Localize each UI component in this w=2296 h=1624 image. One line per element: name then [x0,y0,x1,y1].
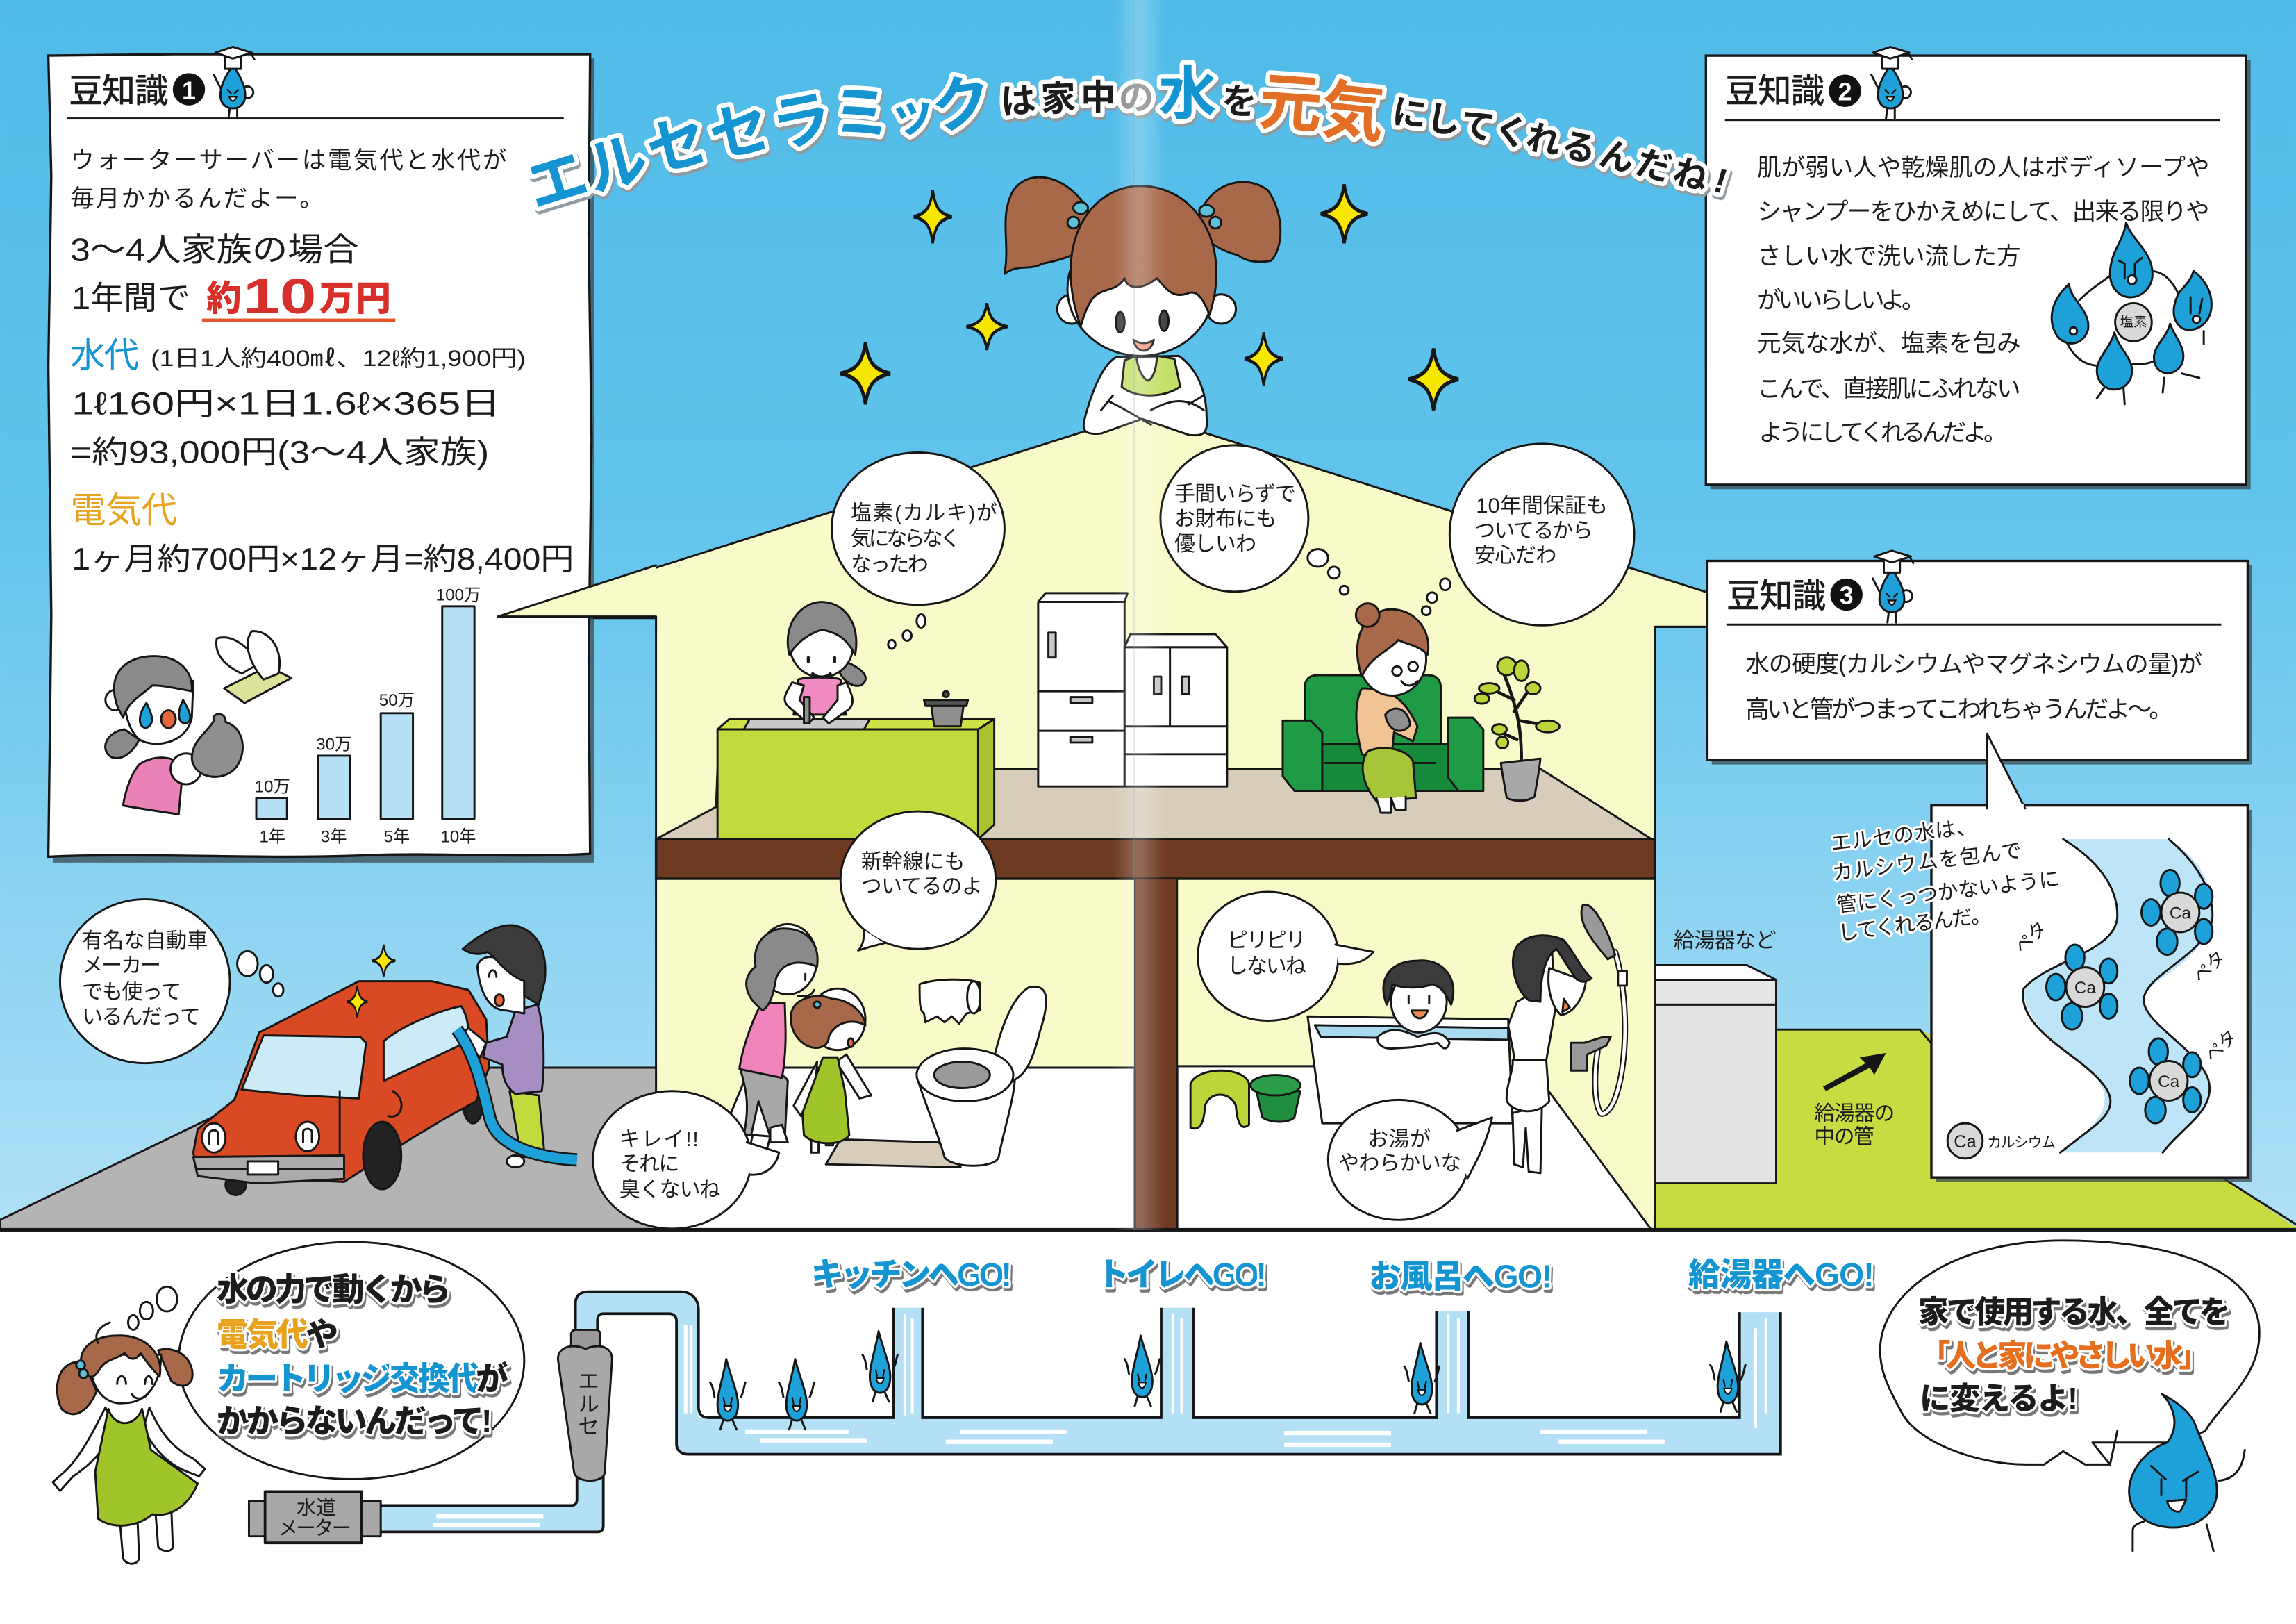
speech bubble: not tingling: ピリピリ [1227,929,1306,952]
mascot 2 [1872,47,1913,119]
upper floor [656,769,1652,839]
title: し [1424,99,1463,142]
bar chart [255,586,481,846]
calcium legend: カルシウム [1987,1135,2056,1151]
woman at kitchen [785,602,865,724]
mascot 1 [214,47,255,119]
house walls and roof [498,413,1815,1230]
pigtail right [1198,182,1281,262]
heading 1 [67,73,564,119]
electricity cost [70,490,574,577]
title: る [1558,126,1600,170]
heading 1: 1 [182,76,196,104]
family cost heading: 1年間で [72,280,190,316]
bubble: no electricity or cartridge cost [178,1242,524,1479]
handwritten note: 管にくっつかないように [1836,867,2061,917]
title: だ [1632,143,1675,189]
family cost heading: 3〜4人家族の場合 [70,231,359,267]
title: を [1221,81,1258,122]
drops surrounding chlorine: 塩素 [2120,315,2147,330]
heading 2: 豆知識 [1725,73,1824,110]
chlorine text [1757,155,2210,447]
title [519,61,1731,222]
panel 1: water server cost [49,47,594,863]
annual cost callout: 10 [243,269,316,324]
water cost: 1ℓ160円×1日1.6ℓ×365日 [72,386,501,422]
pigtail left [1004,177,1092,274]
water meter: メーター [278,1518,351,1540]
speech bubble: car makers: いるんだって [82,1006,201,1029]
title: は [999,80,1037,122]
chlorine text: さしい水で洗い流した方 [1757,244,2021,270]
label: pipe inside water heater: 給湯器の [1814,1102,1895,1125]
crying woman [106,656,243,814]
pipe outlines [381,1292,1781,1532]
speech bubble: easy on wallet: 優しいわ [1174,533,1256,556]
bubble: no electricity or cartridge cost: カートリッジ交換代が [217,1361,508,1397]
speech bubble: 10-year warranty: ついてるから [1474,520,1593,542]
plant [1474,658,1559,801]
calcium legend: Ca [1954,1132,1977,1152]
heading 1: 豆知識 [69,73,168,110]
bar chart: 1年 [259,827,285,846]
GO labels: 給湯器へGO! [1688,1257,1874,1293]
chlorine text: 元気な水が、塩素を包み [1757,331,2021,357]
panel 3: water hardness [1707,551,2252,765]
heading 3: 3 [1840,582,1854,610]
heading 3: 豆知識 [1727,577,1826,615]
bubble: all household water: 「人と家にやさしい水」 [1920,1339,2210,1373]
bubble: no electricity or cartridge cost: 水の力で動くから [217,1271,451,1307]
drops surrounding chlorine [2052,222,2211,404]
grandmother on sofa [1356,604,1429,813]
speech bubble: clean: キレイ!! [619,1128,699,1151]
title: ミ [826,77,896,152]
toilet [917,986,1046,1166]
title: ク [928,69,995,142]
electricity cost: 電気代 [70,490,177,531]
water highlights [433,1314,1767,1527]
speech bubble: easy on wallet: 手間いらずで [1174,483,1296,506]
little girl [791,988,872,1152]
intro text: 毎月かかるんだよー。 [70,185,324,212]
hardness text: 高いと管がつまってこわれちゃうんだよ〜。 [1745,697,2173,723]
speech bubble: 10-year warranty: 安心だわ [1474,545,1556,567]
bar chart: 100万 [436,586,481,604]
speech bubble: not tingling: しないね [1227,955,1306,978]
bathroom [1190,904,1627,1173]
left outside: driveway [0,1068,656,1230]
mother bending [740,924,817,1148]
bathroom floor [1177,1066,1652,1230]
hose [457,1029,577,1160]
speech bubble: shinkansen: 新幹線にも [861,850,965,873]
sky background [0,0,2296,1232]
peta labels: ペタ [2201,1025,2241,1066]
filter: ELSE ceramic [558,1329,612,1481]
bar chart: 5年 [384,827,410,846]
water cost: 水代 [70,335,139,375]
water pipe system [381,1292,1781,1532]
intro text [70,147,507,212]
speech bubble: car makers [60,900,283,1063]
kitchen counter [717,719,995,839]
chlorine text: シャンプーをひかえめにして、出来る限りや [1757,199,2210,225]
speech bubble: chlorine: なったわ [851,553,929,576]
title: ん [1596,134,1638,180]
big girl on the roof [1004,177,1281,436]
man washing car [458,925,545,1167]
bar chart: 30万 [316,735,351,754]
chlorine text: こんで、直接肌にふれない [1757,376,2021,402]
mascot 3 [1873,551,1914,622]
speech bubble: car makers: でも使って [82,981,181,1004]
peta labels: ペタ [2189,947,2229,987]
title: ! [1710,161,1731,201]
title: ラ [766,84,838,161]
big water drop mascot [2110,1394,2245,1551]
bubble: no electricity or cartridge cost: かからないんだって! [217,1403,492,1439]
handwritten note [1829,815,2061,945]
car [193,981,489,1195]
water cost: =約93,000円(3〜4人家族) [70,434,489,470]
bar chart: 10年 [440,827,476,846]
calcium clusters [2142,870,2213,955]
title: ね [1669,152,1712,199]
title: ル [579,124,654,205]
bar chart: 50万 [379,691,415,710]
filter: ELSE ceramic: セ [578,1415,599,1439]
title: く [1490,110,1531,155]
bottom edge line [0,1228,2296,1232]
bubble: all household water [1880,1241,2259,1464]
heading 3 [1727,577,2221,626]
label: water heater: 給湯器など [1674,929,1777,952]
speech bubble: chlorine [832,452,1004,649]
title: て [1457,105,1497,148]
walking water drops [710,1332,1745,1430]
arrow to pipe [1823,1053,1886,1091]
water cost [70,335,526,470]
pipe walls [2023,839,2213,1152]
person showering [1506,936,1592,1173]
filter: ELSE ceramic: エ [578,1370,599,1393]
title: に [1390,92,1429,135]
calcium cluster 2 [2047,945,2118,1029]
title: エ [519,141,596,222]
electricity cost: 1ヶ月約700円×12ヶ月=約8,400円 [72,542,574,577]
speech bubble: 10-year warranty [1422,444,1634,625]
speech bubble: soft water: お湯が [1367,1128,1431,1151]
chlorine text: がいいらしいよ。 [1757,288,1926,314]
chlorine text: ようにしてくれるんだよ。 [1758,420,2008,447]
speech bubble: shinkansen: ついてるのよ [861,875,983,898]
bar chart: 3年 [321,827,347,846]
sparkle on car [372,945,395,977]
title: ッ [886,85,940,144]
annual cost callout [202,269,395,324]
speech bubble: easy on wallet [1161,445,1349,595]
peta labels: ペタ [2011,917,2051,958]
kitchen pot [924,691,968,727]
water pipe [2024,839,2213,1152]
house right wall line [1655,627,1713,1230]
handwritten note: してくれるんだ。 [1837,904,1993,945]
title: セ [704,93,776,171]
handwritten note: カルシウムを包んで [1831,839,2023,885]
fold highlight [1113,0,1165,1230]
house interior: toilet room [740,924,1046,1167]
peta labels [2011,917,2241,1066]
title: の [1119,78,1154,117]
water meter [249,1491,381,1543]
title: セ [640,106,715,185]
speech bubble: chlorine: 気にならなく [851,527,960,550]
filter: ELSE ceramic: ル [578,1393,599,1416]
intro text: ウォーターサーバーは電気代と水代が [70,147,507,174]
handwritten note: エルセの水は、 [1829,815,1978,856]
family cost heading [70,231,359,316]
annual cost callout: 約 [206,279,242,318]
sparkles [840,185,1458,410]
water heater [1655,965,1777,1184]
speech bubble: chlorine: 塩素(カルキ)が [851,502,997,524]
title: 中 [1081,78,1116,117]
boy in tub [1378,961,1454,1049]
annual cost callout: 万円 [319,279,391,318]
fold crease [1133,0,1135,1230]
speech bubble: car makers: メーカー [82,954,161,977]
GO labels: キッチンへGO! [811,1257,1012,1293]
hardness text: 水の硬度(カルシウムやマグネシウムの量)が [1745,652,2202,678]
speech bubble: clean [593,1091,779,1229]
calcium legend [1947,1123,2056,1159]
title: れ [1523,118,1564,163]
label: pipe inside water heater: 中の管 [1814,1126,1874,1149]
title: 水 [1158,61,1217,126]
car and man [193,925,577,1195]
bath stool [1190,1070,1249,1129]
speech bubble: clean: それに [619,1153,679,1176]
hardness text [1745,652,2202,723]
chlorine text: 肌が弱い人や乾燥肌の人はボディソープや [1757,155,2210,181]
water cost: (1日1人約400㎖、12ℓ約1,900円) [151,345,526,371]
toilet paper [920,979,981,1024]
shower [1571,904,1627,1113]
title: 気 [1318,74,1388,151]
bubble: all household water: 家で使用する水、全てを [1918,1295,2230,1329]
torso and arms [1083,356,1207,436]
brown beam and post [656,839,1655,1230]
heading 2 [1725,73,2220,121]
white lower band [0,1232,2296,1624]
bath mat [826,1139,960,1167]
roof eave over panel [498,565,656,630]
GO labels [811,1257,1874,1294]
sparkle on roof [347,986,367,1018]
title: 元 [1257,67,1324,141]
title: 家 [1040,78,1076,119]
speech bubble: clean: 臭くないね [619,1179,720,1202]
right outside: green ground [1655,1029,2296,1230]
speech bubble: car makers: 有名な自動車 [82,929,208,952]
heading 2: 2 [1838,78,1852,106]
refrigerators [1038,593,1227,786]
toilet room floor [683,1068,1135,1230]
girl in green dress [53,1286,205,1564]
flying money [216,631,292,703]
panel 4: pipe with calcium [1829,734,2252,1182]
speech bubble: shinkansen [840,811,996,950]
speech bubble: easy on wallet: お財布にも [1174,508,1277,531]
bath tub [1308,1016,1513,1123]
speech bubble: soft water: やわらかいな [1338,1152,1461,1175]
label: pipe inside water heater [1814,1102,1895,1149]
bar chart: 10万 [255,778,290,797]
water meter: 水道 [297,1497,336,1519]
panel 2: chlorine [1706,47,2251,489]
sofa [1283,675,1483,791]
speech bubble: not tingling [1198,892,1374,1021]
GO labels: お風呂へGO! [1369,1258,1552,1294]
GO labels: トイレへGO! [1097,1257,1267,1293]
bucket [1251,1075,1300,1122]
bubble: no electricity or cartridge cost: 電気代や [217,1317,338,1353]
bubble: all household water: に変えるよ! [1920,1382,2078,1416]
calcium cluster 3 [2130,1038,2201,1123]
speech bubble: 10-year warranty: 10年間保証も [1476,495,1608,517]
speech bubble: soft water [1328,1100,1492,1220]
